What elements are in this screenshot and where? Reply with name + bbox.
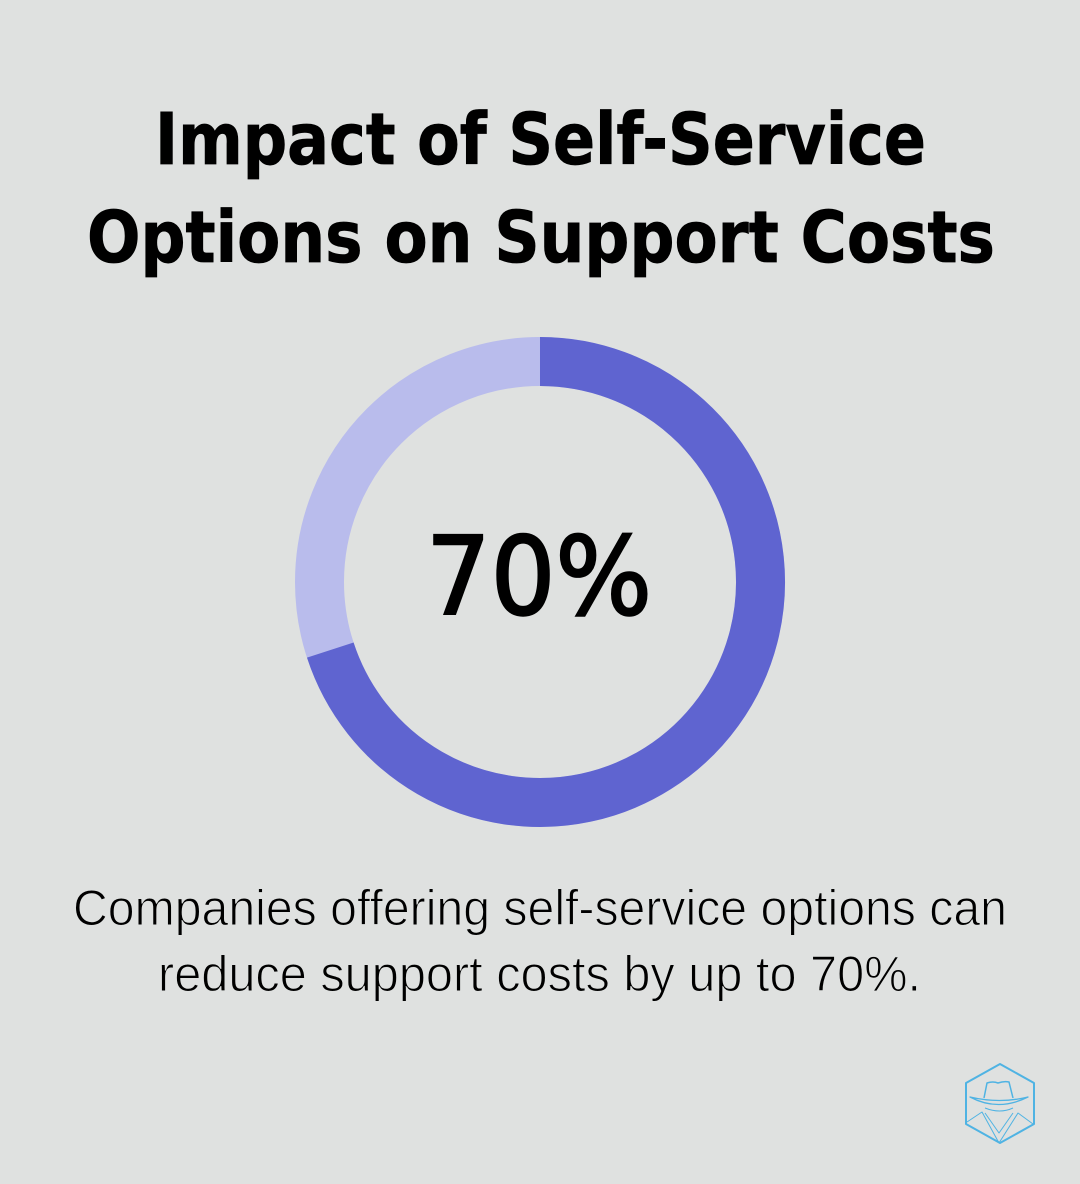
title xyxy=(87,98,995,279)
title: Impact of Self-Service xyxy=(155,98,926,181)
donut value: 70% xyxy=(426,515,652,640)
description: Companies offering self-service options can xyxy=(73,880,1007,936)
description xyxy=(73,880,1007,1002)
icon: logo hexagon with hat xyxy=(966,1064,1034,1143)
donut chart: 70% xyxy=(320,362,761,802)
description: reduce support costs by up to 70%. xyxy=(158,946,921,1002)
